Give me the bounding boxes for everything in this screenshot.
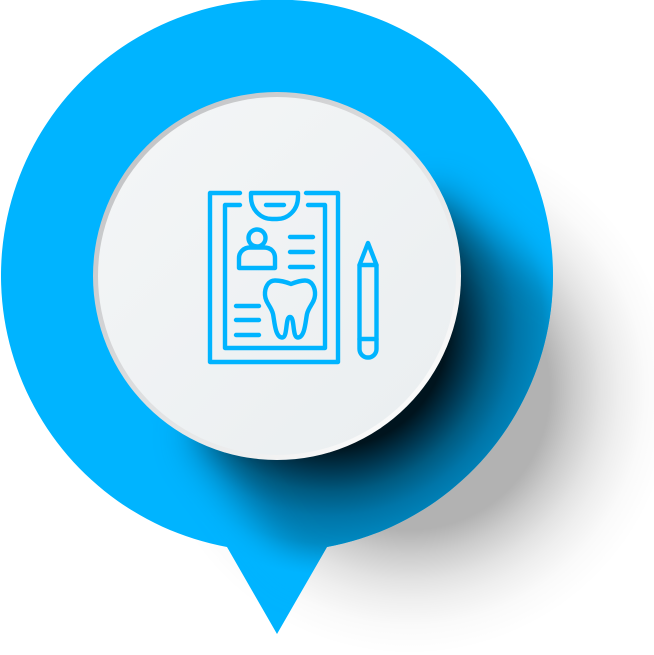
drop shadow behind pin bbox=[145, 125, 654, 655]
clipboard inner sheet bbox=[225, 205, 325, 348]
inner circle bbox=[93, 92, 461, 460]
icon: pencil bbox=[360, 243, 376, 358]
icon: dental clipboard bbox=[210, 193, 376, 362]
text lines right bbox=[290, 237, 313, 267]
clip slot bbox=[266, 203, 284, 207]
clipboard outer frame bbox=[210, 193, 338, 362]
shadow cast on pin bbox=[173, 171, 553, 593]
icon: person bbox=[239, 230, 275, 268]
clipboard clip bbox=[251, 193, 298, 219]
text lines left bbox=[236, 306, 259, 335]
icon: tooth bbox=[265, 280, 315, 338]
